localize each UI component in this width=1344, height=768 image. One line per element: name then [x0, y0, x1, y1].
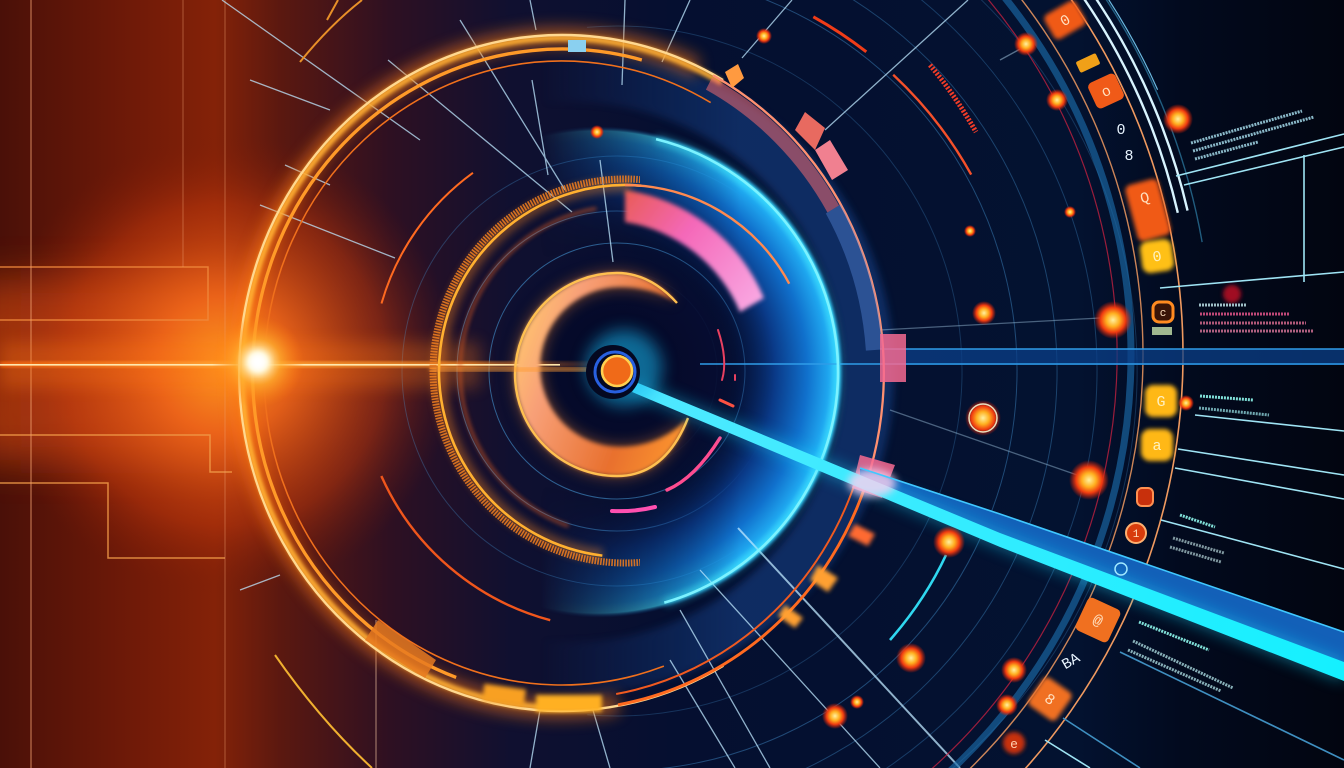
- second orange ring: [428, 174, 790, 566]
- blue horizontal band: [700, 349, 1344, 365]
- control buttons column: 0: [1116, 122, 1126, 139]
- control buttons column: BA: [1059, 650, 1083, 674]
- control buttons column: G: [1156, 394, 1166, 411]
- crescent swirl: [515, 273, 688, 476]
- outer ring segment blocks: [365, 40, 906, 712]
- orange horizontal flare: [0, 342, 620, 388]
- radial spokes: [222, 0, 1100, 768]
- control buttons column: 0: [1058, 12, 1074, 31]
- lower cyan arc: [890, 555, 946, 640]
- centre hub: [586, 330, 662, 406]
- control buttons column: [1003, 0, 1177, 754]
- cyan beam: [632, 383, 1344, 681]
- glowing nodes: [590, 28, 1241, 729]
- control buttons column: e: [1010, 737, 1018, 752]
- control buttons column: 8: [1124, 148, 1134, 165]
- control buttons column: Q: [1138, 190, 1152, 208]
- hatched red arc: [930, 65, 976, 132]
- blue ring band: [548, 53, 897, 692]
- control buttons column: @: [1090, 612, 1105, 631]
- inner orange streak: [430, 368, 600, 371]
- control buttons column: c: [1160, 308, 1166, 320]
- outer orange ring: [121, 0, 1003, 768]
- control buttons column: 1: [1133, 529, 1140, 541]
- control buttons column: 8: [1041, 691, 1058, 710]
- pink accents: [612, 330, 735, 511]
- dark core: [487, 241, 747, 501]
- sun flare: [212, 316, 304, 408]
- pink band: [625, 190, 764, 312]
- micro text blocks: [1128, 111, 1314, 691]
- right side connector lines: [1045, 134, 1344, 768]
- cyan large arc: [307, 81, 889, 663]
- control buttons column: 0: [1152, 248, 1163, 267]
- control buttons column: a: [1152, 438, 1162, 455]
- left circuit lines: [0, 0, 376, 768]
- control buttons column: o: [1099, 83, 1114, 102]
- arc accents lower left and top: [275, 0, 372, 768]
